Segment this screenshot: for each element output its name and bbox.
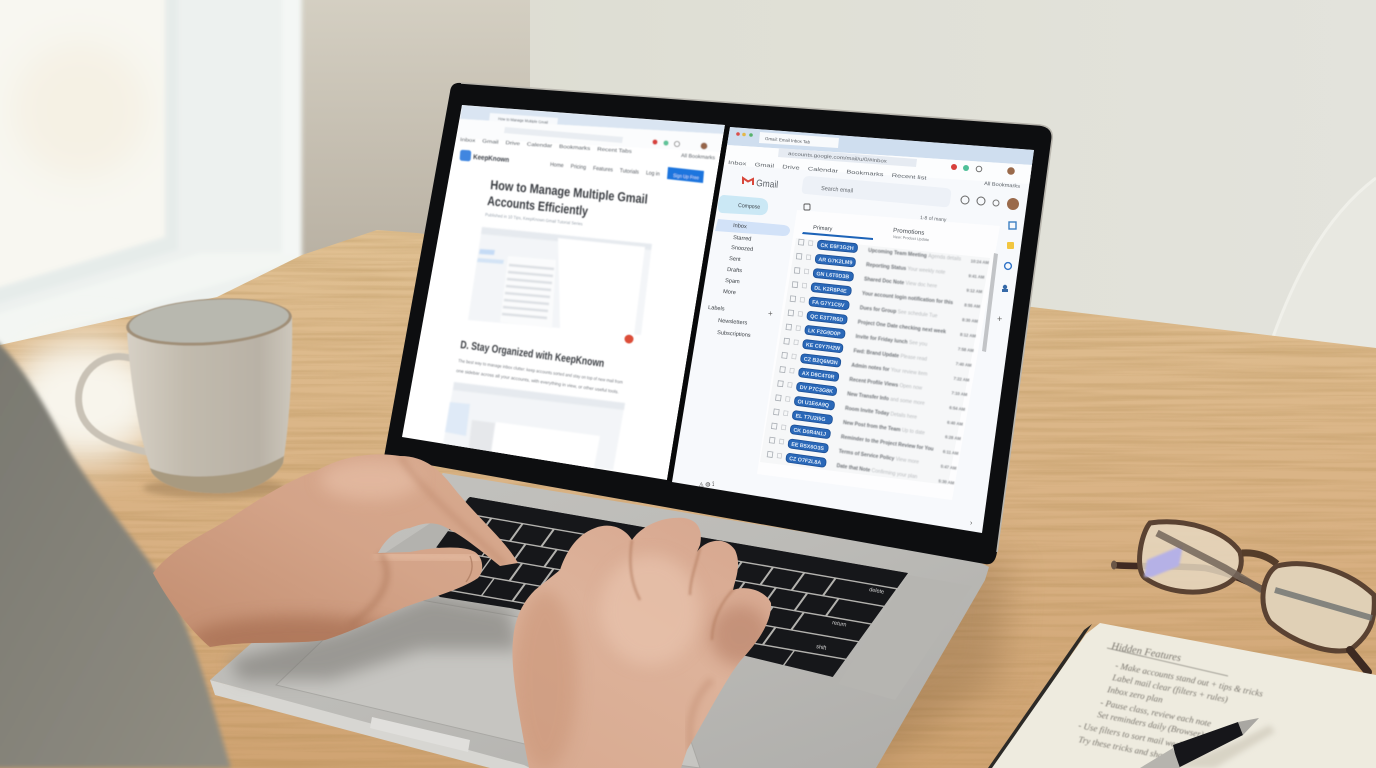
left browser window: article: Sign Up Free [673,173,699,182]
account icons [961,196,969,204]
right browser window: Gmail: Compose [738,203,760,211]
laptop lid [384,83,1052,564]
sidebar items: More [723,289,736,296]
handwriting: - Use filters to sort mail weekly [1078,720,1190,752]
key labels: delete [869,587,884,596]
email rows: AR G7K2LM9 [818,257,853,266]
keys [395,497,908,678]
email rows: Reporting Status Your weekly note [866,262,946,276]
Gmail logo [743,178,779,191]
email rows: Terms of Service Policy View more [838,449,920,466]
left browser window: article: All Bookmarks [681,153,716,161]
window with frame and sill [0,0,302,350]
browser toolbar [458,120,708,150]
email rows: 8:30 AM [962,317,979,324]
near temple arm seen through the lens [1157,533,1262,590]
email rows: LK F2G9D0P [808,328,841,338]
opening notch [370,717,470,752]
lens reflection [1144,545,1183,577]
email rows: Room Invite Today Details here [845,406,917,421]
email rows: FA G7Y1C5V [812,300,845,309]
right browser window: Gmail: Inbox Gmail Drive Calendar Bookmarks Recent list [728,160,927,182]
email rows: Admin notes for Your review item [851,363,928,378]
hand shading [513,590,577,768]
sidebar items: Drafts [727,267,742,274]
sidebar items: Starred [733,235,752,243]
toolbar [724,145,1032,184]
handwriting: Hidden Features [1109,641,1182,664]
email rows: New Post from the Team Up to date [843,420,925,437]
email rows: 9:41 AM [968,273,985,280]
sidebar items: Inbox [733,223,747,230]
email rows: Upcoming Team Meeting Agenda details [868,248,962,263]
keyboard [385,497,908,678]
byline: Published in 10 Tips, KeepKnown Gmail Tutorial Series [485,212,584,226]
side panel icons: + [997,314,1002,324]
person's sleeve [0,335,231,768]
wall background [0,0,1376,360]
right browser window: Gmail: Gmail: Email Inbox Tab [765,136,811,145]
email rows: Project One Date checking next week [857,320,946,335]
white chair in the background [1273,178,1376,349]
screen divider [667,125,730,482]
email rows: AX D8C4T0R [801,371,835,381]
base front edge [210,680,530,768]
email rows: CZ O7F2L8A [789,456,822,466]
email rows: New Transfer Info and some more [847,391,925,407]
laptop [210,83,1052,768]
left lens [1140,522,1241,592]
handwriting: Set reminders daily (Browser) [1097,709,1205,740]
sidebar items: Spam [725,278,740,285]
mug unglazed base [150,456,284,493]
mail toolbar [804,204,810,210]
sidebar items: Subscriptions [717,330,751,339]
right hand [505,510,780,768]
pager chevron: › [970,520,973,527]
sidebar items: Newsletters [718,318,748,327]
mug body [127,317,292,493]
email rows: 7:10 AM [951,390,968,397]
left browser window: article: Accounts Efficiently [487,193,589,219]
right browser window: Gmail: Search email [821,186,853,195]
handwriting: Label mail clear (filters + rules) [1111,672,1229,704]
list scrollbar [982,253,998,352]
handwriting: Inbox zero plan [1106,684,1164,705]
right browser window: Gmail: accounts.google.com/mail/u/0/#inbox [788,151,888,165]
handwriting [1078,641,1264,762]
left browser window: article: Inbox Gmail Drive Calendar Bookmarks Recent Tabs [460,137,632,155]
email rows: GN L6T0D3B [816,271,850,281]
email rows: DV P7C3G8K [799,385,833,395]
sidebar items: + [768,309,773,318]
email rows: Shared Doc Note View doc here [864,276,937,290]
right browser window: Gmail: 1-8 of many [920,215,947,223]
email rows: 6:40 AM [947,420,964,427]
far temple arm [1113,565,1280,600]
email rows: CK E6F1G2H [820,243,854,252]
section paragraph: The best way to manage inbox clutter: keep accounts sorted and stay on top of new mail from [458,358,623,385]
email rows: Date that Note Confirming your plan [836,463,918,480]
email rows: 7:40 AM [955,361,972,368]
coffee mug [79,293,293,498]
email rows: EL T7U2I5G [795,413,826,423]
Gmail logo: Gmail [756,178,779,191]
email rows: Recent Profile Views Open now [849,377,923,392]
sidebar items: Snoozed [731,245,753,253]
sidebar footer icons: ◬ ◍ ⟟ [699,481,714,488]
speaker grille [838,575,972,700]
pen [1140,718,1275,768]
left browser window: article: How to Manage Multiple Gmail [498,116,548,125]
left browser window: article [402,105,725,480]
site navigation: Home Pricing Features Tutorials Log in [550,162,660,178]
email rows: Dues for Group See schedule Tue [859,305,938,319]
right browser window: Gmail: All Bookmarks [984,181,1021,190]
search bar [802,176,951,207]
email rows: 7:58 AM [958,346,975,353]
sidebar items: Sent [729,256,741,263]
email rows: 7:22 AM [953,376,970,383]
folded arm tip [1350,650,1368,672]
handwriting: - Pause class, review each note [1100,697,1212,728]
email rows: CZ B2Q6M3N [803,357,838,367]
site logo [460,150,471,161]
side panel icons [997,222,1016,324]
left hand [153,454,518,647]
notebook with handwritten notes [988,623,1376,768]
email rows: 6:54 AM [949,405,966,412]
article screenshot 1 [468,227,652,335]
sidebar items: Labels [708,305,725,312]
article title: How to Manage Multiple Gmail [490,177,648,207]
email rows: Invite for Friday lunch See you [855,334,928,348]
key labels: return [832,620,847,628]
compose button [718,195,768,215]
article screenshot 2 [442,382,625,478]
left browser window: article: one sidebar across all your accounts, with everything in view, or other useful tools. [456,368,619,394]
mug handle [79,356,147,452]
email rows: 6:28 AM [945,434,962,441]
key labels: shift [816,644,827,652]
key labels [816,587,884,652]
email rows [767,238,990,486]
email rows: 5:30 AM [938,478,955,486]
right lens [1263,564,1374,651]
email rows: EE B5X6O3S [791,442,825,452]
email rows: 10:24 AM [970,258,990,265]
email rows: Fwd: Brand Update Please read [853,348,927,363]
email rows: Reminder to the Project Review for You [840,434,934,453]
bridge [1242,553,1277,564]
email rows: QC E3T7R6D [810,314,844,324]
email rows: 6:11 AM [943,449,959,456]
tab strip [727,127,1034,165]
hand shading [194,610,380,647]
email rows: Your account login notification for this [862,291,954,306]
hand shadow on trackpad [230,595,520,680]
inbox tabs: Primary [813,225,833,233]
reading glasses [1111,522,1374,672]
trackpad [276,600,700,768]
left browser window: article: KeepKnown [473,154,509,164]
email rows: DL K2R8P4E [814,285,847,295]
browser tab strip [460,105,725,134]
right browser window: Gmail [672,127,1034,533]
handwriting: Try these tricks and share [1078,734,1170,762]
right browser window: Gmail: New: Product Update [893,235,929,242]
email rows: OI U1E6A9Q [797,399,829,409]
email rows: 9:12 AM [966,288,983,294]
right browser window: Gmail: Promotions [893,227,925,237]
sidebar items [708,219,790,339]
email rows: 8:55 AM [964,302,981,309]
email rows: CK D0R4N1J [793,428,826,438]
sign up button [667,167,704,183]
email rows: 8:12 AM [960,332,977,339]
mug rim and inside [125,293,293,351]
email rows: 5:47 AM [940,464,957,471]
wooden desk [0,230,1376,768]
section heading: D. Stay Organized with KeepKnown [460,339,605,370]
red action button [624,334,634,344]
message list area [808,226,866,242]
laptop base [210,473,989,768]
handwriting: - Make accounts stand out + tips & tricks [1115,660,1264,699]
email rows: KE C0Y7H2W [805,342,841,352]
